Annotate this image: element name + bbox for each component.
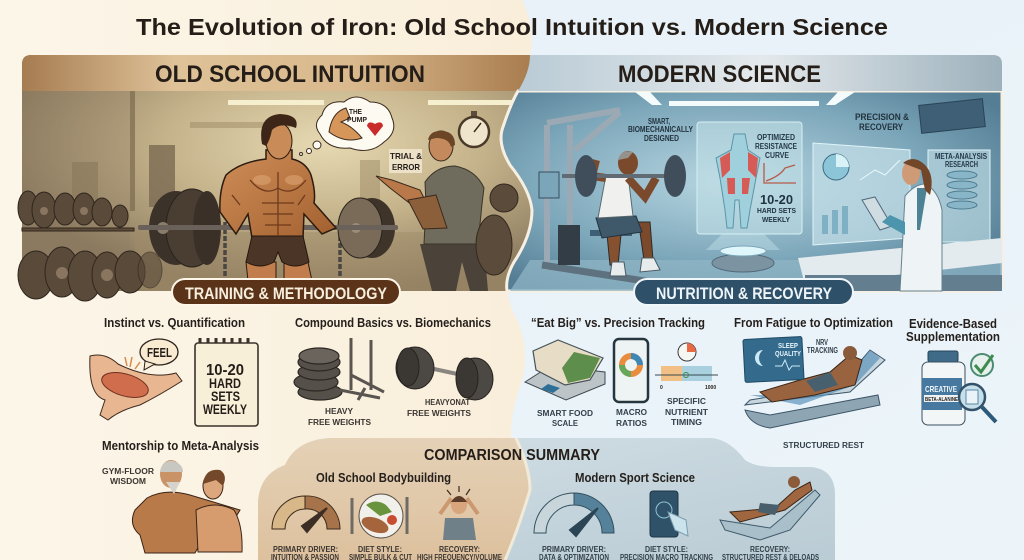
icon: supplement bottle <box>922 351 965 425</box>
panel: meta-analysis research: META-ANALYSIS <box>935 152 988 161</box>
icon: recline bed <box>720 476 820 540</box>
gym-floor wisdom label: WISDOM <box>110 477 146 486</box>
icon: weight plate stack and rack <box>294 338 384 427</box>
old school scene backdrop <box>22 55 542 291</box>
icon: notepad with 10-20 hard sets weekly: WEEKLY <box>203 401 247 417</box>
icon: phone with macro ratios <box>614 339 648 428</box>
stopwatch <box>459 111 489 147</box>
heading: Mentorship to Meta-Analysis <box>102 438 259 453</box>
icon: nutrient timing: 0 <box>660 385 663 391</box>
lab desk <box>798 238 1002 291</box>
old school labels: RECOVERY: <box>439 545 480 554</box>
panel: meta-analysis research: RESEARCH <box>945 160 978 169</box>
shorts <box>246 236 309 266</box>
icon: phone with macro ratios: MACRO <box>616 408 647 417</box>
icon: check badge <box>971 354 993 376</box>
data screen with charts <box>813 143 910 245</box>
icon: plate and cutlery <box>352 494 407 538</box>
icon: supplement bottle: BETA-ALANINE <box>925 397 958 403</box>
callout: biomechanically designed: BIOMECHANICALLY <box>628 125 694 134</box>
bodybuilder with barbell <box>138 114 398 281</box>
icon: weight plate stack and rack: HEAVY <box>325 407 354 416</box>
hologram panel: optimized resistance curve <box>697 122 802 234</box>
modern labels: PRIMARY DRIVER: <box>542 545 606 554</box>
mentor and student figures <box>132 460 242 553</box>
icon: notepad with 10-20 hard sets weekly <box>195 338 258 426</box>
gym-floor wisdom label: GYM-FLOOR <box>102 467 154 476</box>
heading: From Fatigue to Optimization <box>734 315 893 330</box>
barbell bar <box>138 225 398 230</box>
panel: old school intuition <box>18 55 542 301</box>
section: compound basics vs biomechanics <box>294 315 493 427</box>
thought bubble: the pump: PUMP <box>347 117 367 124</box>
callout: biomechanically designed: DESIGNED <box>644 134 679 143</box>
modern scene backdrop <box>501 91 1002 291</box>
old school header band <box>22 55 530 91</box>
hologram panel: optimized resistance curve: HARD SETS <box>757 206 796 215</box>
thought bubble: the pump <box>300 97 394 156</box>
recovery bed with patient <box>745 346 885 428</box>
hologram panel: optimized resistance curve: OPTIMIZED <box>757 133 795 142</box>
modern sport science column <box>534 470 820 560</box>
icon: smart food scale: SCALE <box>552 419 579 428</box>
thought bubble: the pump: THE <box>349 109 362 116</box>
heading <box>906 316 1000 344</box>
icon: notepad with 10-20 hard sets weekly: SETS <box>211 388 240 404</box>
icon: weight plate stack and rack: FREE WEIGHTS <box>308 418 372 427</box>
hologram panel: optimized resistance curve: RESISTANCE <box>755 142 798 151</box>
heading: Supplementation <box>906 329 1000 344</box>
hologram pedestal <box>706 234 780 272</box>
title: The Evolution of Iron: Old School Intuition vs. Modern Science <box>136 14 888 40</box>
scientist in lab coat <box>862 159 942 291</box>
icon: arm muscle and feel bubble: FEEL <box>147 345 172 360</box>
heading: “Eat Big” vs. Precision Tracking <box>531 315 705 330</box>
icon: tablet tracking <box>650 491 688 537</box>
hologram panel: optimized resistance curve: WEEKLY <box>762 215 790 224</box>
icon: nutrient timing: SPECIFIC <box>667 397 706 406</box>
icon: notepad with 10-20 hard sets weekly: 10-20 <box>206 362 244 379</box>
subheading: Old School Bodybuilding <box>316 470 451 485</box>
head and hair <box>266 123 292 159</box>
structured rest label: STRUCTURED REST <box>783 441 864 450</box>
icon: phone with macro ratios: RATIOS <box>616 419 648 428</box>
callout: precision and recovery: PRECISION & <box>855 112 909 123</box>
hrv tracking label: TRACKING <box>807 346 838 355</box>
callout: biomechanically designed: SMART, <box>648 117 670 126</box>
section: eat big vs precision tracking <box>525 315 718 428</box>
monitor: sleep quality: SLEEP <box>778 341 798 350</box>
icon: magnifying glass <box>959 384 996 422</box>
pill: training and methodology: TRAINING & METHODOLOGY <box>185 284 388 303</box>
legs and torso <box>246 262 312 281</box>
barbell left plates <box>149 189 221 267</box>
summary heading: COMPARISON SUMMARY <box>424 447 600 464</box>
heading: Compound Basics vs. Biomechanics <box>295 315 491 330</box>
gym-floor wisdom label <box>102 467 154 486</box>
hrv tracking label: NRV <box>816 338 828 347</box>
gym plates right <box>476 184 518 275</box>
icon: gauge <box>272 496 340 532</box>
icon: smart food scale: SMART FOOD <box>537 409 593 418</box>
callout: trial and error: TRIAL & <box>390 151 422 161</box>
panel: meta-analysis research <box>928 150 990 242</box>
old school labels: DIET STYLE: <box>358 545 402 554</box>
barbell right plates <box>338 198 395 258</box>
icon: nutrient timing: TIMING <box>671 418 702 427</box>
section: from fatigue to optimization <box>734 315 893 450</box>
old school bodybuilding column <box>271 470 503 560</box>
icon: arm muscle and feel bubble <box>90 339 182 420</box>
section: instinct vs quantification <box>90 315 258 426</box>
dumbbell racks <box>18 191 162 301</box>
pill: training and methodology <box>172 279 400 305</box>
coach with clipboard <box>376 131 488 291</box>
section: evidence-based supplementation <box>906 316 1000 425</box>
monitor: sleep quality <box>743 336 804 382</box>
modern header band <box>518 55 1002 91</box>
pill: nutrition and recovery: NUTRITION & RECOVERY <box>656 284 833 303</box>
old school labels: PRIMARY DRIVER: <box>273 545 338 554</box>
modern labels: DIET STYLE: <box>645 545 688 554</box>
modern heading: MODERN SCIENCE <box>618 61 821 88</box>
chains <box>225 222 340 280</box>
monitor: sleep quality: QUALITY <box>775 349 801 358</box>
machine frame <box>539 110 670 285</box>
panel: comparison summary <box>250 430 850 560</box>
icon: stressed lifter <box>440 486 478 540</box>
callout: precision and recovery: RECOVERY <box>859 122 904 133</box>
icon: nutrient timing: 1000 <box>705 385 716 391</box>
icon: smart food scale <box>525 340 605 428</box>
callout: trial and error <box>389 149 422 173</box>
section: mentorship to meta-analysis <box>102 438 259 553</box>
hrv tracking label <box>807 338 838 355</box>
subheading: Modern Sport Science <box>575 470 695 485</box>
modern labels <box>539 545 819 560</box>
pill: nutrition and recovery <box>634 279 853 305</box>
heading: Instinct vs. Quantification <box>104 315 245 330</box>
callout: trial and error: ERROR <box>392 162 420 172</box>
icon: nutrient timing <box>655 343 718 427</box>
icon: barbell: HEAVYONAT <box>425 398 470 407</box>
old school labels <box>271 545 503 560</box>
icon: barbell <box>396 347 493 418</box>
hologram panel: optimized resistance curve: CURVE <box>765 151 790 160</box>
callout: biomechanically designed <box>628 117 694 143</box>
callout: precision and recovery <box>855 112 909 133</box>
modern labels: RECOVERY: <box>750 545 790 554</box>
icon: nutrient timing: NUTRIENT <box>665 408 708 417</box>
icon: notepad with 10-20 hard sets weekly: HARD <box>209 375 241 391</box>
seated athlete with barbell <box>562 151 686 276</box>
icon: gauge <box>534 493 614 536</box>
panel: modern science <box>501 55 1002 291</box>
old school heading: OLD SCHOOL INTUITION <box>155 61 425 88</box>
heading: Evidence-Based <box>909 316 997 331</box>
icon: supplement bottle: CREATIVE <box>925 384 957 394</box>
icon: barbell: FREE WEIGHTS <box>407 409 472 418</box>
hologram panel: optimized resistance curve: 10-20 <box>760 192 793 207</box>
